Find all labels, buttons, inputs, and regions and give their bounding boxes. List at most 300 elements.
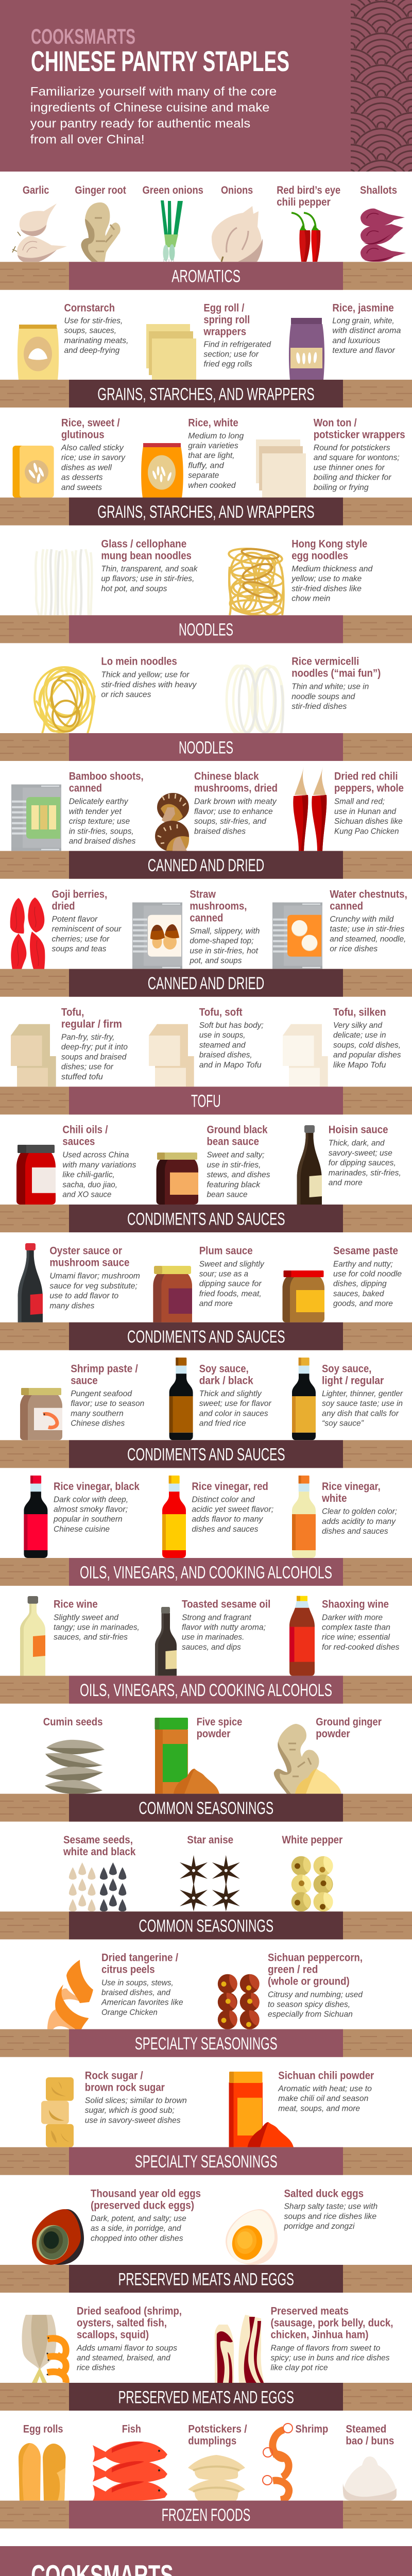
icon: plum sauce jar [153, 1266, 192, 1323]
icon: onion [212, 206, 263, 262]
panel: header [0, 0, 412, 172]
heading: rice vermicelli: noodles (“mai fun”) [291, 668, 381, 680]
shelf: aromatics: AROMATICS [171, 267, 241, 286]
icon: lo mein noodles [31, 664, 101, 737]
description: black rice vinegar [53, 1495, 128, 1534]
heading: glass noodles: mung bean noodles [101, 550, 192, 562]
heading: egg roll: Egg roll / [203, 302, 245, 314]
heading: white pepper: White pepper [282, 1834, 342, 1846]
item: shrimp paste [20, 1363, 144, 1440]
heading: preserved eggs: (preserved duck eggs) [91, 2199, 194, 2211]
heading: black mushrooms [194, 771, 278, 794]
description: egg roll: section; use for [203, 350, 259, 359]
item: cumin seeds [43, 1716, 105, 1794]
description: black bean sauce: use in stir-fries, [207, 1161, 261, 1170]
description: dark soy: and color in sauces [199, 1409, 268, 1418]
description: cornstarch: Use for stir-fries, [64, 316, 123, 326]
icon: rock sugar [41, 2077, 74, 2147]
title: CHINESE PANTRY STAPLES [31, 45, 289, 77]
description: shaoxing wine: rice wine; essential [322, 1633, 390, 1642]
description: soft tofu: use in soups, [199, 1031, 245, 1040]
shelf: common 2: COMMON SEASONINGS [139, 1917, 273, 1936]
panel: canned and dried row 2 [0, 888, 412, 997]
item: black mushrooms [155, 771, 278, 852]
description: black bean sauce: bean sauce [207, 1190, 248, 1199]
shelf: aromatics [0, 262, 412, 290]
heading: water chestnuts [330, 888, 407, 912]
description: light soy: “soy sauce” [322, 1419, 364, 1428]
description: egg noodles: stir-fried dishes like [291, 584, 362, 593]
item: bamboo shoots [11, 771, 144, 851]
description: hoisin: savory-sweet; use [329, 1149, 392, 1158]
icon: shallots [360, 209, 406, 262]
labels: aromatics: Green onions [142, 184, 203, 196]
heading: goji berries: dried [52, 900, 75, 912]
panel: grains row 1 [0, 302, 412, 408]
item: white rice vinegar [292, 1476, 397, 1558]
icon: preserved meats [215, 2315, 264, 2383]
description: lo mein: stir-fried dishes with heavy [101, 681, 197, 689]
description: plum sauce: and more [199, 1299, 233, 1308]
description: cornstarch: soups, sauces, [64, 327, 116, 335]
item: sesame seeds [63, 1834, 136, 1911]
heading: ground ginger: powder [316, 1728, 350, 1740]
description: straw mushrooms: use in stir-fries, hot [190, 946, 259, 955]
icon: dark soy bottle [169, 1358, 193, 1440]
item: egg noodles [228, 538, 373, 618]
item: dried tangerine peels [47, 1952, 183, 2029]
shelf: condiments 1: CONDIMENTS AND SAUCES [127, 1209, 285, 1229]
heading: rock sugar [85, 2070, 165, 2093]
shelf: tofu [0, 1087, 412, 1114]
item: salted duck eggs [226, 2188, 377, 2265]
description: silken tofu: delicate; use in [333, 1031, 386, 1040]
labels: frozen foods [23, 2424, 394, 2447]
panel: footer [0, 2546, 412, 2576]
description: preserved meats: like clay pot rice [271, 2364, 328, 2372]
item: rice wine [20, 1596, 140, 1676]
description: egg noodles [291, 565, 373, 603]
heading: egg roll: spring roll [203, 314, 250, 326]
description: egg roll: fried egg rolls [203, 360, 252, 369]
heading: egg noodles [291, 538, 367, 562]
description: water chestnuts [330, 915, 406, 954]
icon: preserved egg [32, 2209, 84, 2265]
description: jasmine rice: with distinct aroma [332, 327, 401, 335]
item: red rice vinegar [162, 1476, 273, 1558]
heading: straw mushrooms [190, 888, 247, 924]
description: bamboo shoots: with tender yet [69, 807, 122, 816]
description: firm tofu [61, 1033, 128, 1081]
icon: white vinegar bottle [292, 1476, 316, 1558]
shelf: tofu: TOFU [191, 1092, 221, 1111]
heading: jasmine rice: Rice, jasmine [332, 302, 394, 314]
icon: garlic [12, 204, 67, 262]
heading: black bean sauce: Ground black [207, 1124, 268, 1136]
description: firm tofu: Pan-fry, stir-fry, [61, 1033, 114, 1042]
description: bamboo shoots: crisp texture; use [69, 817, 130, 826]
description: silken tofu: Very silky and [333, 1021, 383, 1030]
icon: soft tofu [149, 1024, 194, 1087]
panel: tofu [0, 1007, 412, 1114]
heading: black mushrooms: Chinese black [194, 771, 259, 783]
description: won ton: boiling and thicker for [314, 473, 391, 482]
description: sesame paste: goods, and more [333, 1299, 393, 1308]
description: light soy [322, 1389, 403, 1428]
labels: frozen foods: Potstickers / [188, 2424, 247, 2435]
icon: ginger and pile [274, 1724, 341, 1794]
panel: oils row 2 [0, 1596, 412, 1704]
description: won ton: boiling or frying [314, 483, 369, 492]
heading: light soy: Soy sauce, [322, 1363, 371, 1375]
description: won ton [314, 444, 400, 492]
item: black rice vinegar [24, 1476, 140, 1558]
icon: chili oil jar [16, 1145, 56, 1205]
description: jasmine rice [332, 316, 401, 355]
heading: chili oils [62, 1124, 108, 1148]
heading: soft tofu: Tofu, soft [199, 1007, 243, 1019]
description: firm tofu: stuffed tofu [61, 1073, 103, 1081]
labels: frozen foods: Shrimp [296, 2424, 328, 2435]
description: chili oils [62, 1151, 136, 1199]
description: jasmine rice: texture and flavor [332, 346, 395, 355]
heading: rock sugar: Rock sugar / [85, 2070, 143, 2081]
heading: dried seafood: oysters, salted fish, [77, 2317, 167, 2329]
description: shrimp paste: flavor; use to season [71, 1399, 144, 1408]
icon: wrappers [146, 324, 196, 380]
labels: aromatics: Ginger root [75, 184, 126, 196]
item: glass noodles [36, 538, 198, 615]
description: rice vermicelli [291, 683, 369, 711]
description: silken tofu: like Mapo Tofu [333, 1061, 386, 1070]
description: light soy: soy sauce taste; use in [322, 1399, 403, 1408]
icon: hoisin bottle [297, 1125, 322, 1205]
shelf: condiments 3 [0, 1440, 412, 1468]
icon: egg rolls [19, 2443, 66, 2501]
icon: tangerine peel [47, 1960, 93, 2029]
description: glass noodles: up flavors; use in stir-fries, [101, 574, 194, 583]
panel: preserved row 2 [0, 2306, 412, 2411]
description: egg noodles: chow mein [291, 595, 330, 603]
item: ground ginger powder [274, 1716, 382, 1794]
description: red rice vinegar: adds flavor to many [192, 1515, 263, 1524]
description: sesame paste: sauces, baked [333, 1290, 385, 1298]
description: oyster sauce: Umami flavor; mushroom [49, 1272, 140, 1281]
icon: cornstarch bag [18, 325, 59, 380]
description: dried seafood: and steamed, braised, and [77, 2353, 171, 2363]
shelf: noodles 1 [0, 615, 412, 643]
heading: sesame seeds: Sesame seeds, [63, 1834, 133, 1846]
description: hoisin: marinades, stir-fries, [329, 1168, 401, 1177]
description: red rice vinegar [192, 1495, 273, 1534]
heading: ground ginger: Ground ginger [316, 1716, 382, 1728]
item: firm tofu [11, 1007, 128, 1087]
heading: tangerine: Dried tangerine / [101, 1952, 178, 1963]
description: silken tofu [333, 1021, 401, 1070]
description: bamboo shoots: Delicately earthy [69, 798, 128, 806]
heading: dried seafood [77, 2306, 182, 2341]
shelf: oils 2 [0, 1676, 412, 1704]
icon: bamboo shoots can [11, 785, 61, 851]
heading: oyster sauce: Oyster sauce or [49, 1245, 122, 1257]
heading: preserved meats: (sausage, pork belly, duck, [271, 2317, 393, 2329]
description: shaoxing wine [322, 1613, 400, 1652]
heading: dark soy [199, 1363, 253, 1386]
description: oyster sauce: many dishes [49, 1301, 94, 1310]
icon: sweet rice bag [12, 446, 54, 498]
panel: common seasonings row 1 [0, 1716, 412, 1822]
description: preserved meats [271, 2344, 389, 2372]
description: black bean sauce: Sweet and salty; [207, 1151, 265, 1160]
icon: black vinegar bottle [24, 1476, 47, 1558]
description: sweet rice: as desserts [61, 473, 103, 482]
labels: aromatics: Shallots [360, 184, 397, 196]
shelf: common 1 [0, 1794, 412, 1822]
icon: green onions [161, 200, 183, 262]
description: sesame oil: use in marinades. [182, 1633, 244, 1642]
heading: black bean sauce [207, 1124, 268, 1148]
heading: straw mushrooms: canned [190, 912, 223, 924]
description: silken tofu: soups, cold dishes, [333, 1041, 401, 1049]
description: white rice: that are light, [188, 451, 235, 460]
description: lo mein: Thick and yellow; use for [101, 671, 190, 680]
description: shrimp paste: many southern [71, 1409, 124, 1418]
item: white pepper [282, 1834, 342, 1911]
description: goji berries [52, 915, 122, 954]
icon: fish [93, 2442, 167, 2501]
description: egg noodles: Medium thickness and [291, 565, 373, 573]
heading: lo mein: Lo mein noodles [101, 656, 177, 668]
item: shaoxing wine [289, 1596, 400, 1676]
labels: frozen foods: Fish [122, 2424, 141, 2435]
shelf: common 1: COMMON SEASONINGS [139, 1799, 273, 1818]
description: tangerine: Orange Chicken [101, 2008, 158, 2017]
heading: egg roll [203, 302, 250, 337]
description: sweet rice: rice; use in savory [61, 453, 126, 462]
shelf: condiments 1 [0, 1205, 412, 1232]
heading: sichuan peppercorn [268, 1952, 363, 1987]
description: white rice vinegar: Clear to golden color; [322, 1507, 397, 1516]
icon: hong kong egg noodles [228, 547, 284, 618]
description: white rice: fluffy, and [188, 461, 225, 470]
description: won ton: use thinner ones for [314, 463, 385, 472]
labels: frozen foods: dumplings [188, 2435, 236, 2447]
description: dried red chili: Kung Pao Chicken [334, 827, 399, 836]
description: chili powder: meat, soups, and more [278, 2104, 360, 2113]
panel: specialty seasonings row 2 [0, 2070, 412, 2175]
item: hoisin sauce [297, 1124, 401, 1205]
heading: shrimp paste: Shrimp paste / [71, 1363, 138, 1375]
description: rice wine: Slightly sweet and [54, 1613, 119, 1622]
description: lo mein [101, 671, 197, 699]
description: rice wine [54, 1613, 140, 1642]
heading: chili powder: Sichuan chili powder [278, 2070, 374, 2081]
icon: shaoxing wine bottle [289, 1596, 315, 1676]
heading: straw mushrooms: Straw [190, 888, 216, 900]
labels: aromatics: chili pepper [277, 196, 331, 208]
description: white rice vinegar: adds acidity to many [322, 1517, 396, 1526]
labels: frozen foods: Steamed [346, 2424, 386, 2435]
description: glass noodles: Thin, transparent, and soak [101, 565, 198, 573]
description: sesame paste: dishes, dipping [333, 1280, 387, 1289]
heading: rice vermicelli: Rice vermicelli [291, 656, 359, 668]
heading: dried red chili: peppers, whole [334, 783, 404, 794]
description: cornstarch [64, 316, 129, 355]
item: plum sauce [153, 1245, 265, 1323]
heading: dried seafood: scallops, squid) [77, 2329, 149, 2341]
icon: shrimp paste jar [20, 1388, 62, 1440]
description: lo mein: or rich sauces [101, 690, 151, 699]
heading: sweet rice: Rice, sweet / [61, 417, 120, 429]
description: goji berries: Potent flavor [52, 915, 98, 924]
shelf: canned 2: CANNED AND DRIED [148, 974, 264, 993]
heading: light soy [322, 1363, 384, 1386]
description: white rice [188, 432, 244, 490]
description: egg roll: Find in refrigerated [203, 340, 271, 349]
description: white rice: separate [188, 471, 219, 480]
labels: aromatics [23, 184, 397, 208]
icon: dried fish and shrimp [22, 2315, 66, 2383]
description: shrimp paste: Chinese dishes [71, 1419, 125, 1428]
item: dark soy sauce [169, 1358, 271, 1440]
heading: hoisin: Hoisin sauce [329, 1124, 388, 1136]
description: sichuan peppercorn: to season spicy dishes, [268, 2000, 350, 2009]
heading: cornstarch: Cornstarch [64, 302, 115, 314]
description: tangerine: Use in soups, stews, [101, 1978, 174, 1987]
heading: straw mushrooms: mushrooms, [190, 900, 247, 912]
heading: chili oils: Chili oils / [62, 1124, 108, 1136]
panel: oils row 1 [0, 1476, 412, 1586]
icon: chili powder jar and pile [229, 2072, 294, 2147]
description: shrimp paste: Pungent seafood [71, 1389, 132, 1398]
description: rock sugar: sugar, which is good sub; [85, 2106, 175, 2115]
description: dried red chili [334, 798, 403, 836]
description: dried red chili: Sichuan dishes like [334, 817, 403, 826]
shelf: canned 1 [0, 851, 412, 879]
description: white rice: when cooked [188, 481, 236, 490]
description: glass noodles [101, 565, 198, 593]
description: shaoxing wine: for red-cooked dishes [322, 1643, 400, 1652]
shelf: grains 2: GRAINS, STARCHES, AND WRAPPERS [97, 502, 315, 522]
description: chili powder: make chili oil and season [278, 2094, 368, 2103]
intro text: from all over China! [30, 132, 145, 146]
icon: steamed bao [343, 2456, 397, 2501]
description: hoisin [329, 1139, 401, 1187]
shelf: condiments 3: CONDIMENTS AND SAUCES [127, 1445, 285, 1465]
shelf: canned 2 [0, 969, 412, 997]
heading: sichuan peppercorn: green / red [268, 1963, 318, 1975]
description: rice vermicelli: stir-fried dishes [291, 702, 347, 711]
heading: preserved eggs: Thousand year old eggs [91, 2188, 201, 2199]
description: plum sauce: Sweet and slightly [199, 1260, 265, 1268]
description: rice wine: tangy; use in marinades, [54, 1623, 140, 1632]
shelf: frozen: FROZEN FOODS [162, 2505, 250, 2525]
heading: five spice: powder [197, 1728, 230, 1740]
heading: rice wine: Rice wine [54, 1599, 98, 1611]
description: black rice vinegar: Dark color with deep, [54, 1495, 128, 1504]
heading: firm tofu: regular / firm [61, 1019, 122, 1030]
panel: condiments row 1 [0, 1124, 412, 1232]
description: bamboo shoots [69, 798, 135, 846]
panel: frozen foods [0, 2424, 412, 2529]
shelf: noodles 1: NOODLES [179, 620, 233, 640]
logo: COOKSMARTS [31, 24, 135, 48]
description: jasmine rice: and luxurious [332, 336, 380, 345]
description: sichuan peppercorn: especially from Sichuan [268, 2010, 353, 2019]
panel: specialty seasonings row 1 [0, 1952, 412, 2057]
panel: condiments row 2 [0, 1243, 412, 1350]
heading: silken tofu: Tofu, silken [333, 1007, 386, 1019]
heading: five spice: Five spice [197, 1716, 242, 1728]
description: rock sugar: Solid slices; similar to brown [85, 2096, 187, 2105]
description: bamboo shoots: in stir-fries, soups, [69, 827, 134, 836]
description: plum sauce [199, 1260, 265, 1308]
description: rice vermicelli: noodle soups and [291, 692, 355, 701]
description: sesame paste: use for cold noodle [333, 1269, 402, 1279]
description: red rice vinegar: dishes and sauces [192, 1525, 258, 1534]
labels: aromatics: Garlic [23, 184, 49, 196]
heading: preserved meats: chicken, Jinhua ham) [271, 2329, 369, 2341]
description: tangerine: American favorites like [101, 1998, 183, 2007]
shelf: condiments 2: CONDIMENTS AND SAUCES [127, 1327, 285, 1347]
icon: sesame oil bottle [155, 1607, 177, 1676]
item: cornstarch [18, 302, 129, 380]
icon: red vinegar bottle [162, 1476, 186, 1558]
heading: white rice vinegar: white [321, 1493, 347, 1504]
heading: dried red chili [334, 771, 404, 794]
item: jasmine rice [289, 302, 401, 380]
icon: red bird's eye chili pepper [291, 213, 320, 262]
heading: bamboo shoots: canned [69, 783, 102, 794]
item: star anise [180, 1834, 240, 1911]
description: soft tofu: braised dishes, [199, 1051, 252, 1060]
icon: star anise [180, 1855, 240, 1911]
icon: sesame paste jar [282, 1270, 324, 1323]
description: chili oils: like chili-garlic, [62, 1171, 115, 1179]
description: salted eggs: porridge and zongzi [284, 2222, 355, 2231]
description: dried seafood [76, 2344, 177, 2372]
description: sweet rice: dishes as well [61, 463, 112, 472]
intro text: Familiarize yourself with many of the core [30, 85, 277, 99]
icon: won ton wrappers [256, 439, 306, 498]
description: oyster sauce: sauce for veg substitute; [49, 1282, 138, 1291]
description: egg noodles: yellow; use to make [291, 574, 362, 583]
description: chili oils: sacha, duo jiao, [62, 1180, 117, 1189]
shelf: specialty 2 [0, 2147, 412, 2175]
icon: rice wine bottle [20, 1596, 45, 1676]
item: toasted sesame oil [155, 1599, 270, 1676]
shelf: frozen [0, 2501, 412, 2529]
description: sesame oil: flavor with nutty aroma; [182, 1623, 266, 1632]
labels: aromatics: Red bird’s eye [277, 184, 340, 196]
icon: black mushrooms [155, 793, 189, 852]
description: hoisin: for dipping sauces, [329, 1159, 396, 1167]
icon: jasmine rice bag [289, 318, 324, 380]
icon: glass noodles [36, 549, 92, 615]
description: rock sugar [85, 2096, 187, 2125]
icon: oyster sauce bottle [18, 1243, 43, 1323]
icon: firm tofu [11, 1024, 56, 1087]
heading: dried red chili: Dried red chili [334, 771, 398, 783]
description: dark soy: Thick and slightly [199, 1389, 262, 1398]
icon: shrimp [263, 2424, 293, 2500]
panel: common seasonings row 2 [0, 1834, 412, 1939]
item: lo mein [31, 656, 197, 737]
item: sichuan chili powder [229, 2070, 374, 2147]
description: salted eggs [284, 2202, 377, 2231]
description: preserved eggs [91, 2214, 186, 2243]
icon: dumplings [188, 2455, 245, 2501]
